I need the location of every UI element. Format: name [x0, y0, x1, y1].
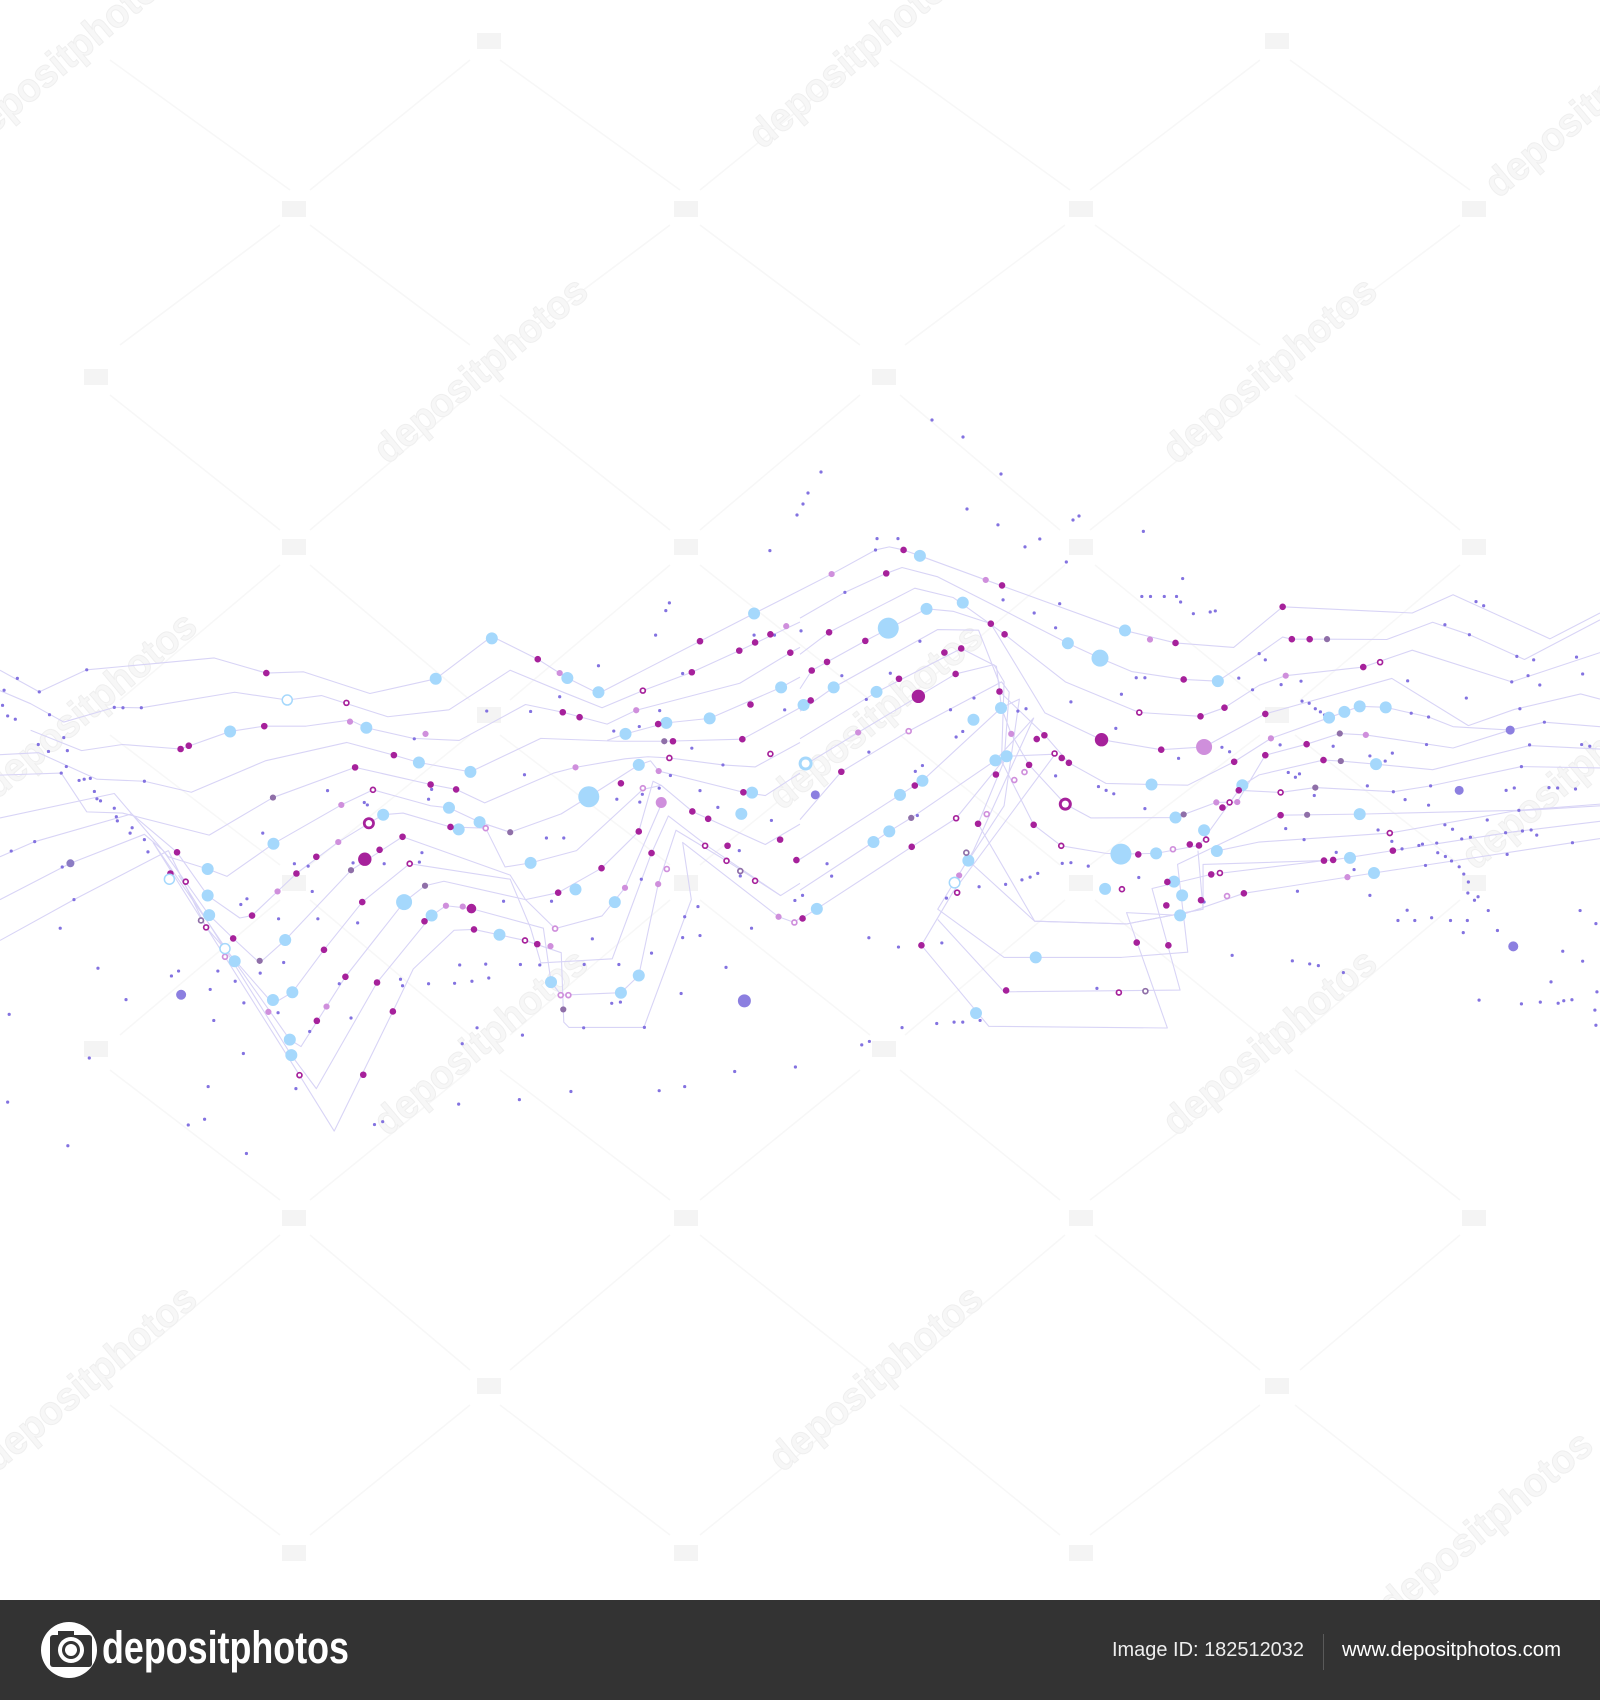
ring nodes right: [806, 662, 1390, 993]
wave lines left: [0, 590, 800, 1131]
grey purple nodes left: [70, 741, 744, 1009]
light blue nodes left: [208, 613, 781, 1055]
watermark text: depositphotos: [365, 940, 596, 1144]
image id: Image ID: 182512032: [1112, 1639, 1304, 1661]
scattered dots above the wave: [797, 420, 1079, 520]
watermark text: depositphotos: [760, 614, 991, 818]
watermark text: depositphotos: [760, 1276, 991, 1480]
wave lines right: [800, 547, 1600, 1028]
watermark lattice: [110, 60, 1470, 1535]
watermark text: depositphotos: [1154, 940, 1385, 1144]
watermark camera icons: [84, 33, 1486, 1561]
divider: [1323, 1634, 1324, 1670]
footer bar: [0, 1600, 1600, 1700]
watermark text: depositphotos: [365, 268, 596, 472]
pink nodes left: [268, 626, 786, 1012]
light blue nodes right: [804, 556, 1386, 1013]
magenta nodes left: [170, 634, 796, 1075]
ring nodes left: [169, 691, 794, 1075]
small purple dots left: [3, 551, 795, 1154]
wave network: left half: [0, 551, 800, 1154]
grey purple nodes right: [815, 639, 1513, 946]
magenta nodes right: [803, 550, 1393, 990]
small purple dots right: [801, 525, 1597, 1045]
pink nodes right: [832, 574, 1366, 877]
icon: camera logo: [41, 1622, 97, 1678]
logo wordmark: depositphotos: [102, 1622, 349, 1673]
wave network: right half: [800, 525, 1600, 1045]
watermark text: depositphotos: [1154, 268, 1385, 472]
website url: www.depositphotos.com: [1341, 1639, 1561, 1661]
